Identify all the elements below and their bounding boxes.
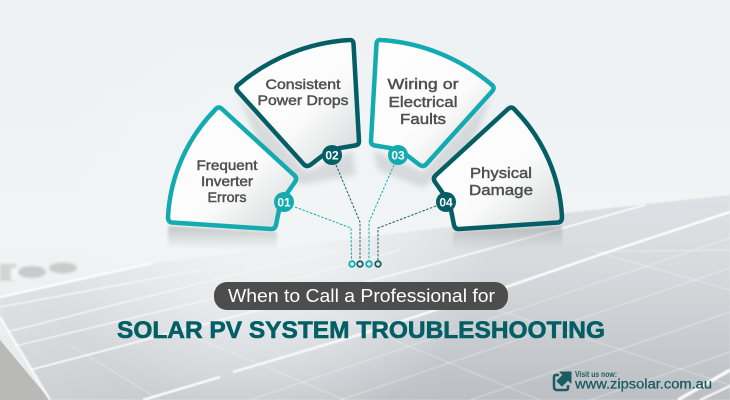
- label 04: Physical: [470, 165, 532, 182]
- label 01: Frequent: [196, 157, 258, 173]
- footer website link: [554, 370, 712, 392]
- badge 01: 01: [277, 196, 291, 210]
- badge 02: 02: [325, 148, 339, 162]
- card shadows: [168, 95, 562, 251]
- connector lines: [295, 165, 436, 260]
- badge 04: 04: [439, 196, 453, 210]
- heading pill: [214, 282, 508, 310]
- label 02: Consistent: [266, 76, 341, 92]
- label 03: Faults: [400, 111, 446, 128]
- panel 02: Consistent Power Drops: [236, 40, 359, 166]
- connector end dots: [349, 261, 381, 267]
- label 04: Damage: [469, 182, 533, 199]
- label 01: Errors: [208, 189, 246, 205]
- panel 03: Wiring or Electrical Faults: [371, 40, 494, 166]
- label 02: Power Drops: [258, 92, 348, 108]
- label 03: Electrical: [388, 94, 458, 111]
- main title: SOLAR PV SYSTEM TROUBLESHOOTING: [117, 317, 605, 344]
- website url: www.zipsolar.com.au: [574, 376, 712, 392]
- icon: external link: [554, 372, 571, 390]
- heading pill: When to Call a Professional for: [228, 286, 495, 306]
- badge 03: 03: [391, 148, 405, 162]
- panel 04: Physical Damage: [434, 108, 562, 229]
- label 03: Wiring or: [388, 76, 458, 93]
- panel 01: Frequent Inverter Errors: [168, 108, 296, 229]
- visit label: Visit us now:: [575, 370, 617, 379]
- label 01: Inverter: [201, 173, 253, 189]
